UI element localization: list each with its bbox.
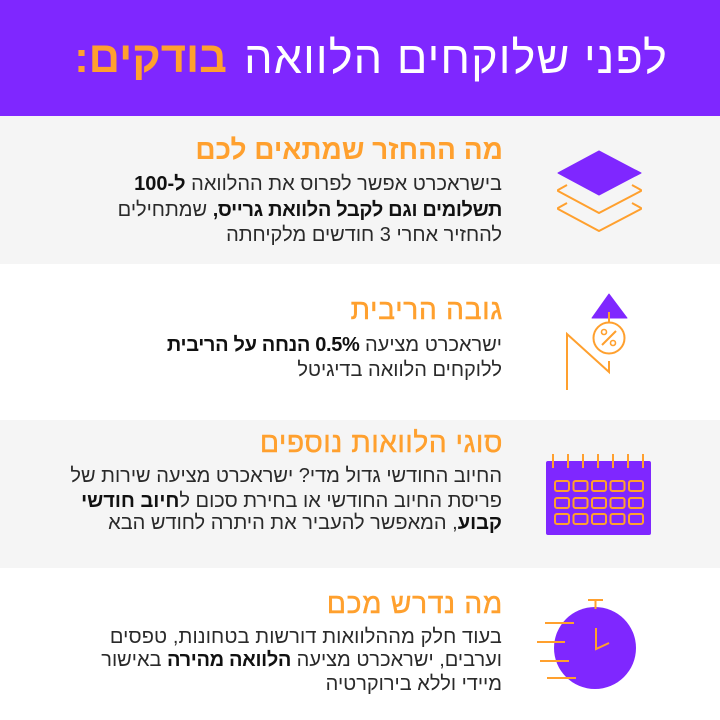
heading: סוגי הלוואות נוספים <box>260 427 503 458</box>
text block <box>118 173 502 246</box>
text block <box>101 626 502 695</box>
panel: other loans <box>0 420 720 568</box>
icon: calendar <box>546 454 651 535</box>
heading: גובה הריבית <box>351 294 503 325</box>
text block: פריסת החיוב החודשי או בחירת סכום לחיוב חודשי <box>81 490 502 512</box>
heading: מה נדרש מכם <box>327 588 503 619</box>
title: בודקים: <box>74 34 227 82</box>
panel: repayment <box>0 116 720 264</box>
title: לפני שלוקחים הלוואה <box>244 32 668 83</box>
icon: interest percent <box>566 294 628 390</box>
icon: stopwatch <box>537 599 636 689</box>
panel: requirements <box>0 568 720 720</box>
text block: וערבים, ישראכרט מציעה הלוואה מהירה באישור <box>101 649 502 671</box>
text block: ללוקחים הלוואה בדיגיטל <box>297 359 502 381</box>
text block: ישראכרט מציעה 0.5% הנחה על הריבית <box>167 334 502 356</box>
panel: interest <box>0 264 720 420</box>
heading: מה ההחזר שמתאים לכם <box>195 134 503 165</box>
text block: תשלומים וגם לקבל הלוואת גרייס, שמתחילים <box>118 199 502 221</box>
header band <box>0 0 720 116</box>
text block: בישראכרט אפשר לפרוס את ההלוואה ל-100 <box>134 173 502 195</box>
text block: בעוד חלק מההלוואות דורשות בטחונות, טפסים <box>110 626 502 648</box>
text block: החיוב החודשי גדול מדי? ישראכרט מציעה שירות של <box>70 465 502 487</box>
text block: מיידי וללא בירוקרטיה <box>326 673 502 695</box>
text block <box>70 465 502 534</box>
text block: להחזיר אחרי 3 חודשים מלקיחתה <box>226 224 502 246</box>
icon: layers <box>557 150 642 232</box>
text block <box>167 334 502 381</box>
text block: קבוע, המאפשר להעביר את היתרה לחודש הבא <box>108 512 502 534</box>
